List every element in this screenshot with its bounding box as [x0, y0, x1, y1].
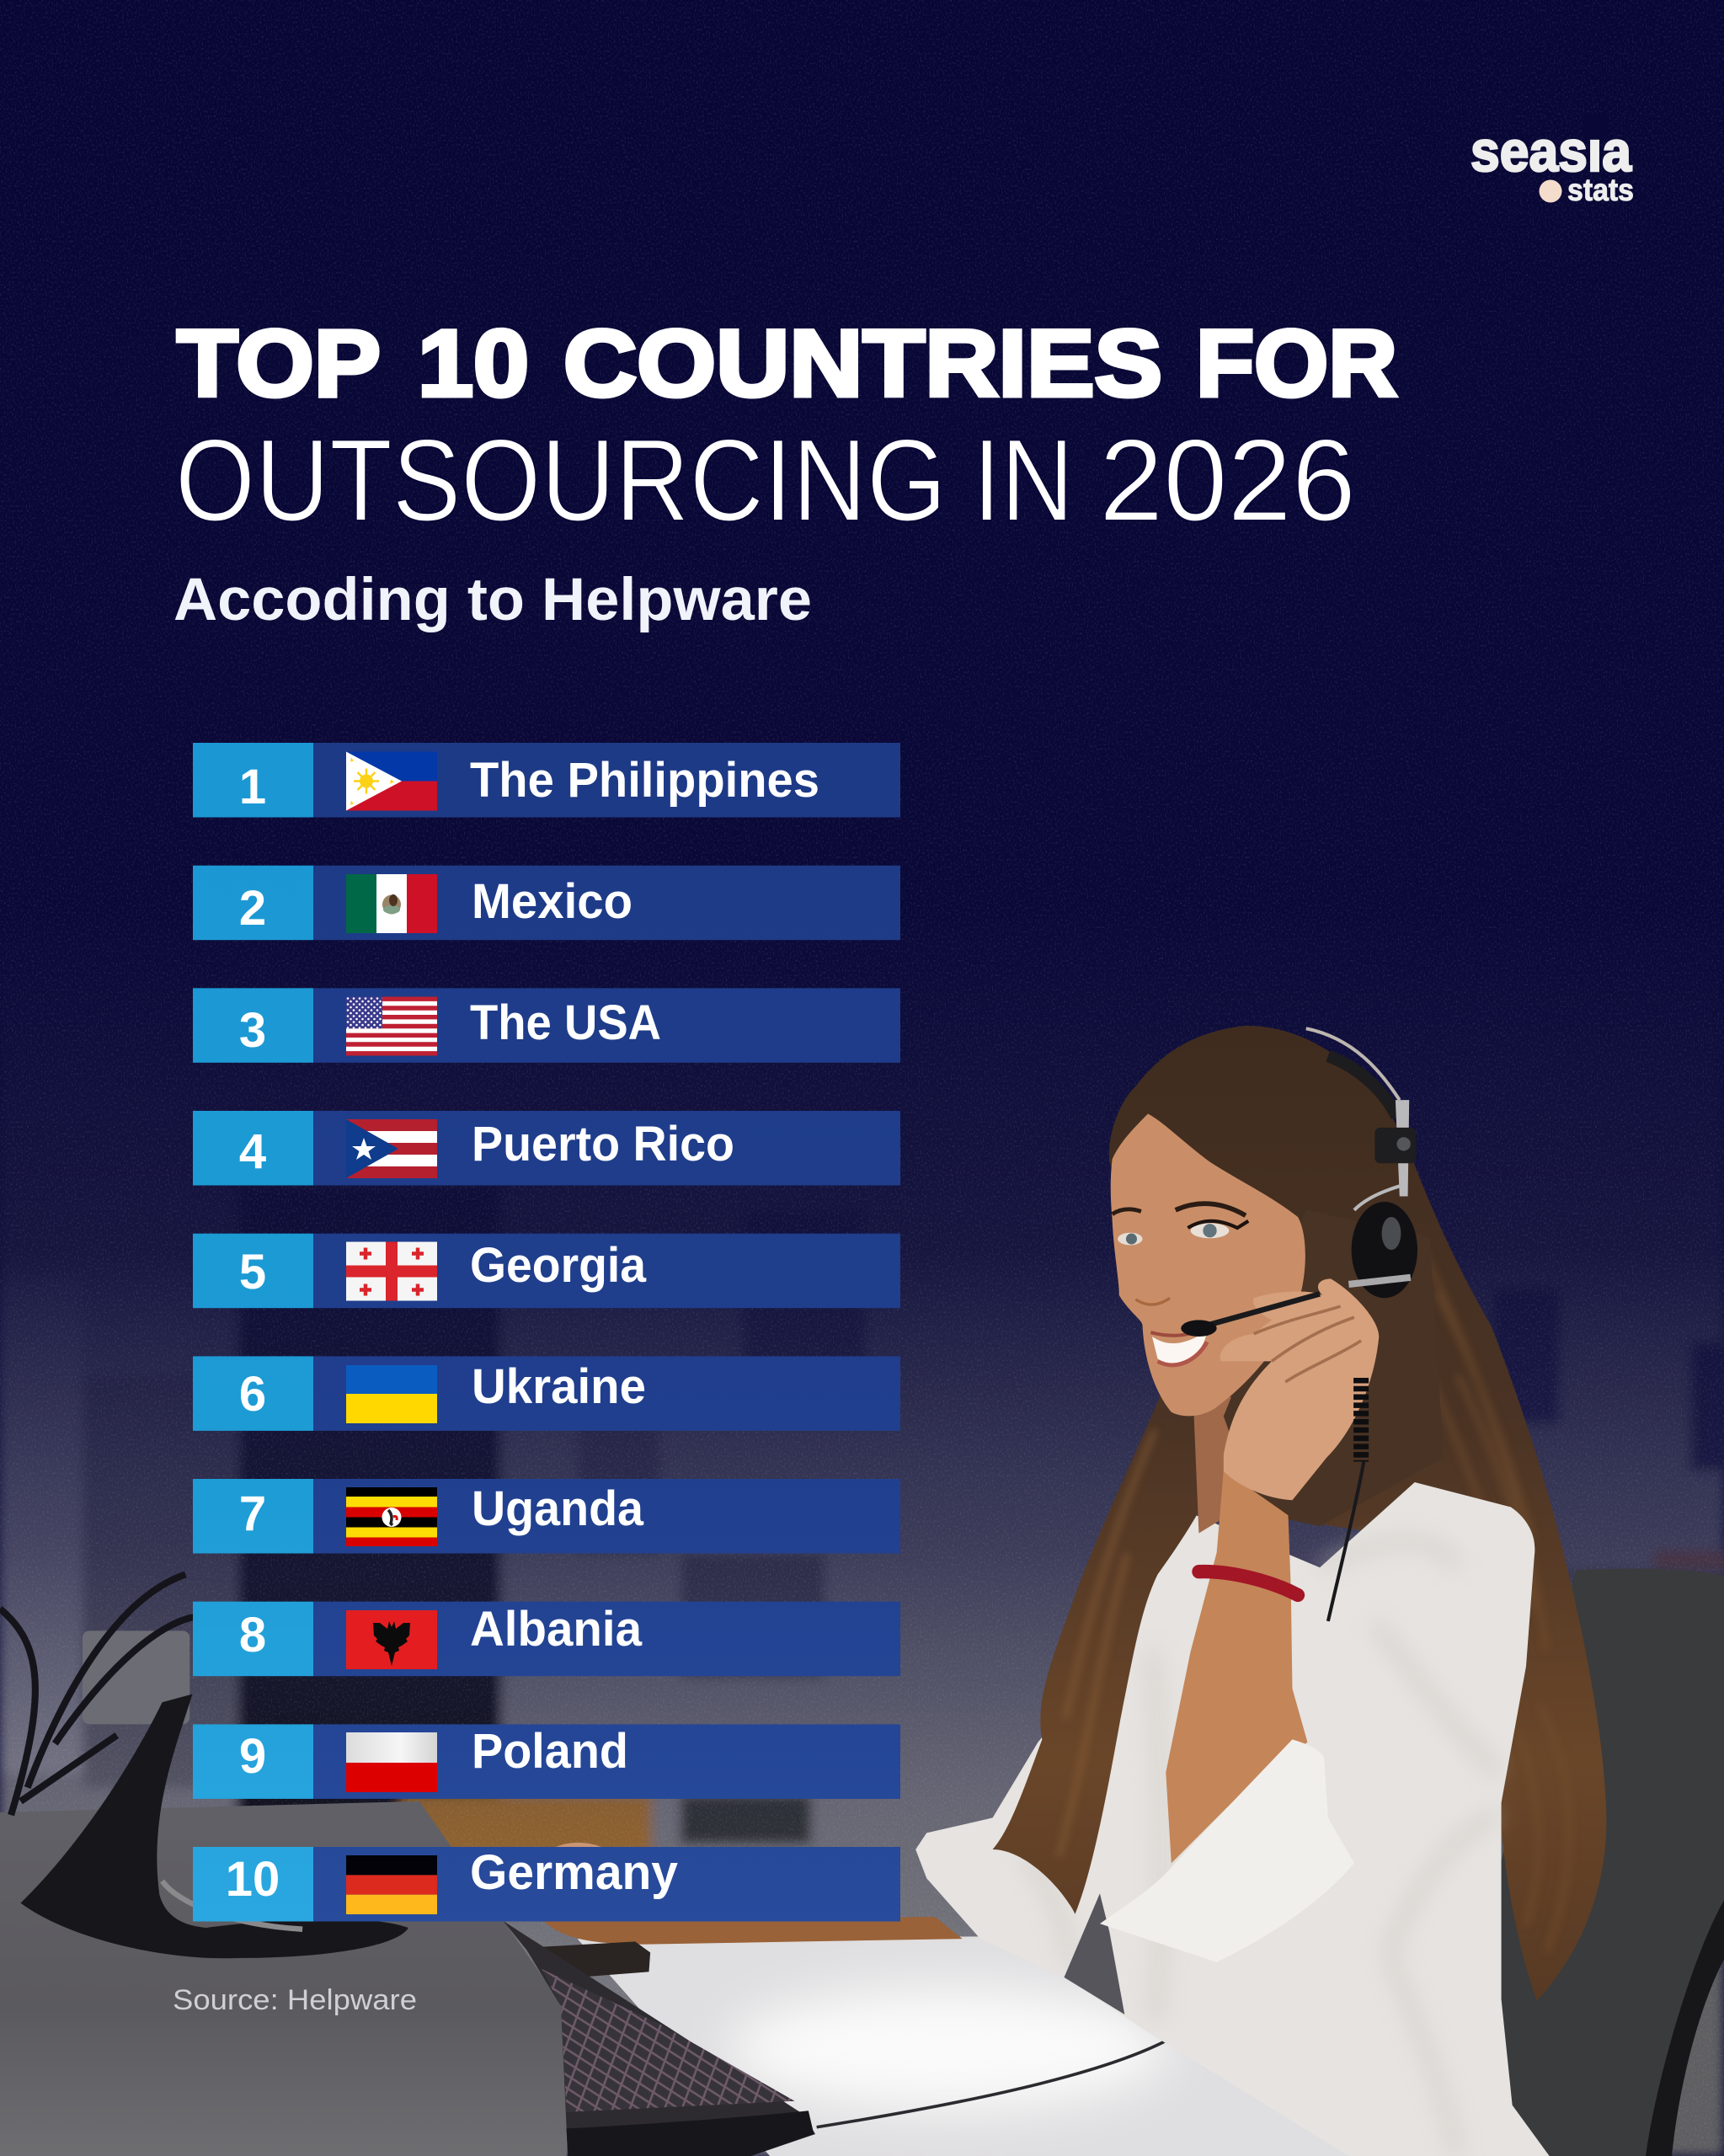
- country name: Puerto Rico: [472, 1117, 734, 1171]
- rank box: [193, 1234, 313, 1308]
- hair strands, right: [1402, 1237, 1569, 1952]
- rank box: [193, 866, 313, 940]
- country name: Ukraine: [472, 1359, 646, 1414]
- left hand: [550, 1843, 608, 1859]
- country name: The USA: [470, 995, 661, 1050]
- smartphone: [539, 1941, 650, 1977]
- office chair: [1485, 1569, 1724, 2156]
- title: line one: 10: [418, 311, 529, 416]
- face: [1111, 1113, 1305, 1416]
- flag: Germany: [346, 1855, 437, 1914]
- gray foreground desk panel: [0, 1801, 567, 2156]
- ranking row 1: [193, 743, 900, 817]
- title: line two: OUTSOURCING: [175, 415, 947, 546]
- bar: [313, 1847, 900, 1922]
- hand on headset: [1220, 1278, 1379, 1500]
- title: line one: [177, 311, 1397, 416]
- bar: [313, 1724, 900, 1799]
- country name: Mexico: [472, 874, 632, 929]
- rank box: [193, 988, 313, 1063]
- flag: Philippines: [346, 751, 437, 810]
- ranking row 5: [193, 1234, 900, 1308]
- hair strands, left: [1059, 1430, 1155, 1856]
- rank number: 1: [239, 760, 266, 814]
- long hair, back layer: [1109, 1026, 1606, 2001]
- rank number: 8: [239, 1608, 266, 1662]
- rank box: [193, 1847, 313, 1922]
- keyboard: [503, 1921, 815, 2156]
- bar: [313, 988, 900, 1063]
- bar: [313, 743, 900, 817]
- country name: Albania: [470, 1602, 643, 1657]
- flag: Ukraine: [346, 1365, 437, 1423]
- title: line one: TOP: [177, 311, 381, 416]
- bar: [313, 1111, 900, 1186]
- subtitle: Accoding to Helpware: [173, 567, 812, 633]
- title: line two: IN: [973, 415, 1074, 546]
- flag: Uganda: [346, 1487, 437, 1546]
- rank box: [193, 1356, 313, 1431]
- rank number: 4: [239, 1124, 266, 1179]
- country name: The Philippines: [470, 753, 819, 808]
- rank box: [193, 1724, 313, 1799]
- gap under sleeve: [1064, 1893, 1124, 2015]
- rank number: 3: [239, 1003, 266, 1058]
- white desk: [578, 1936, 1354, 2156]
- rank box: [193, 1602, 313, 1676]
- blouse cuff: [1100, 1739, 1354, 1962]
- title: line one: COUNTRIES: [563, 311, 1162, 416]
- bar: [313, 1602, 900, 1676]
- blouse folds: [1024, 1541, 1498, 2156]
- rank number: 10: [226, 1852, 280, 1907]
- photo: blurred office background: [0, 825, 1724, 2156]
- bar: [313, 1234, 900, 1308]
- country name: Germany: [470, 1845, 678, 1900]
- monitor stand and cables: [0, 1574, 408, 1958]
- flag: Mexico: [346, 874, 437, 933]
- blouse torso: [915, 1482, 1550, 2156]
- rank number: 6: [239, 1367, 266, 1422]
- country name: Poland: [472, 1724, 628, 1779]
- ranking row 6: [193, 1356, 900, 1431]
- inner hair behind hand: [1224, 1210, 1444, 1526]
- ranking row 3: [193, 988, 900, 1063]
- long hair, front left layer: [993, 1375, 1230, 1914]
- flag: Georgia: [346, 1241, 437, 1300]
- bar: [313, 866, 900, 940]
- rank number: 9: [239, 1729, 266, 1784]
- source note: Source: Helpware: [173, 1984, 417, 2016]
- title: line two: 2026: [1099, 415, 1356, 546]
- neck: [1193, 1396, 1244, 1533]
- desk cable: [817, 1947, 1250, 2127]
- rank number: 2: [239, 881, 266, 936]
- ranking row 9: [193, 1724, 900, 1799]
- ranking row 2: [193, 866, 900, 940]
- ranking row 4: [193, 1111, 900, 1186]
- desk highlight: [729, 1987, 1169, 2111]
- flag: USA: [346, 997, 437, 1056]
- rank box: [193, 743, 313, 817]
- flag: Albania: [346, 1610, 437, 1669]
- left forearm on desk: [543, 1917, 963, 1945]
- ranking row 10: [193, 1845, 900, 1922]
- headset: [1181, 1028, 1417, 1621]
- flag: Puerto Rico: [346, 1119, 437, 1178]
- country name: Uganda: [472, 1481, 644, 1536]
- logo: seasia stats: [1470, 114, 1634, 207]
- ranking row 8: [193, 1602, 900, 1676]
- rank box: [193, 1479, 313, 1553]
- bar: [313, 1356, 900, 1431]
- logo i-dot cover: [1583, 114, 1609, 138]
- rank number: 5: [239, 1245, 266, 1299]
- title: line one: FOR: [1196, 311, 1397, 416]
- rank number: 7: [239, 1486, 266, 1541]
- logo dot: [1540, 180, 1561, 202]
- logo sub word: stats: [1567, 173, 1634, 207]
- ranking row 7: [193, 1479, 900, 1553]
- raised forearm: [1166, 1470, 1307, 1863]
- rank box: [193, 1111, 313, 1186]
- logo wordmark: seasia: [1470, 120, 1632, 184]
- bar: [313, 1479, 900, 1553]
- photo: woman at desk with headset: [0, 1026, 1724, 2156]
- finger lines: [1254, 1306, 1361, 1382]
- country name: Georgia: [470, 1238, 647, 1293]
- flag: Poland: [346, 1732, 437, 1792]
- red bracelet: [1198, 1572, 1298, 1595]
